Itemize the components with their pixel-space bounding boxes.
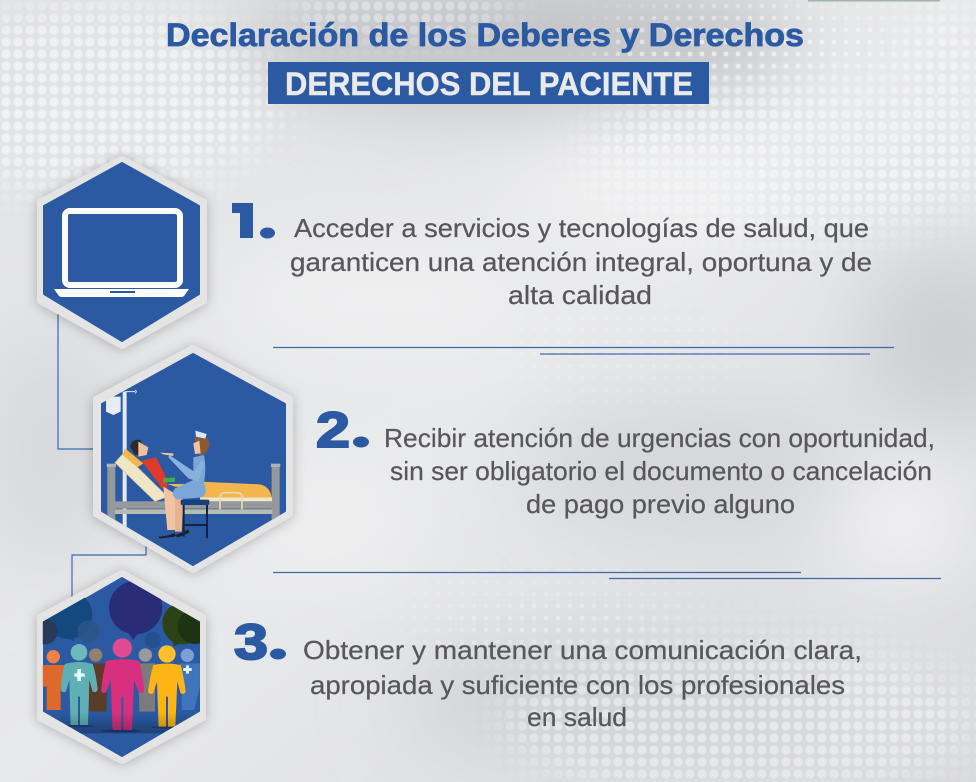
person: teal: [61, 644, 98, 725]
bed frame: [107, 465, 115, 520]
hexagon 2: nurse and patient: [96, 348, 290, 570]
icon: crowd with speech bubbles: [42, 582, 200, 734]
text block 1: alta calidad: [508, 280, 652, 310]
number 2: 2: [316, 402, 350, 458]
point 3: [234, 614, 862, 732]
person: yellow: [148, 645, 186, 727]
connector: hexagon 2 to hexagon 3: [72, 546, 146, 598]
title: Declaración de los Deberes y Derechos: [166, 17, 804, 53]
nurse: [195, 435, 209, 456]
text block 2: Recibir atención de urgencias con oportunidad,: [384, 423, 935, 453]
text block 3: en salud: [527, 702, 627, 732]
hexagon 3: people communicating: [32, 573, 212, 761]
stool: [181, 500, 209, 505]
subtitle banner: DERECHOS DEL PACIENTE: [285, 66, 693, 102]
divider lines 2: [273, 572, 941, 578]
text block 2: de pago previo alguno: [526, 489, 795, 519]
text block 1: [290, 213, 872, 310]
speech bubbles: [109, 581, 162, 634]
patient: [130, 440, 143, 455]
text block 1: garanticen una atención integral, oportuna y de: [290, 247, 872, 277]
person: magenta: [101, 638, 144, 730]
connector: hexagon 1 to hexagon 2: [58, 312, 97, 449]
text block 3: apropiada y suficiente con los profesionales: [310, 670, 845, 700]
backrest: [115, 453, 167, 501]
icon: hospital bed scene: [106, 390, 280, 539]
number 1: [232, 203, 275, 238]
IV pole and bag: [123, 392, 127, 532]
point 2: [316, 402, 935, 519]
point 1: [232, 203, 872, 310]
text block 2: sin ser obligatorio el documento o cancelación: [390, 456, 932, 486]
hexagon 1: laptop icon: [40, 159, 204, 346]
text block 1: Acceder a servicios y tecnologías de salud, que: [294, 213, 869, 243]
text block 3: [303, 635, 862, 732]
icon: laptop: [54, 211, 189, 297]
divider lines 1: [273, 348, 894, 354]
number 3: 3: [234, 614, 268, 670]
ground shadows: [102, 729, 142, 732]
background people: [40, 648, 200, 712]
text block 3: Obtener y mantener una comunicación clara,: [303, 635, 862, 665]
tray: [163, 477, 175, 483]
text block 2: [384, 423, 935, 519]
